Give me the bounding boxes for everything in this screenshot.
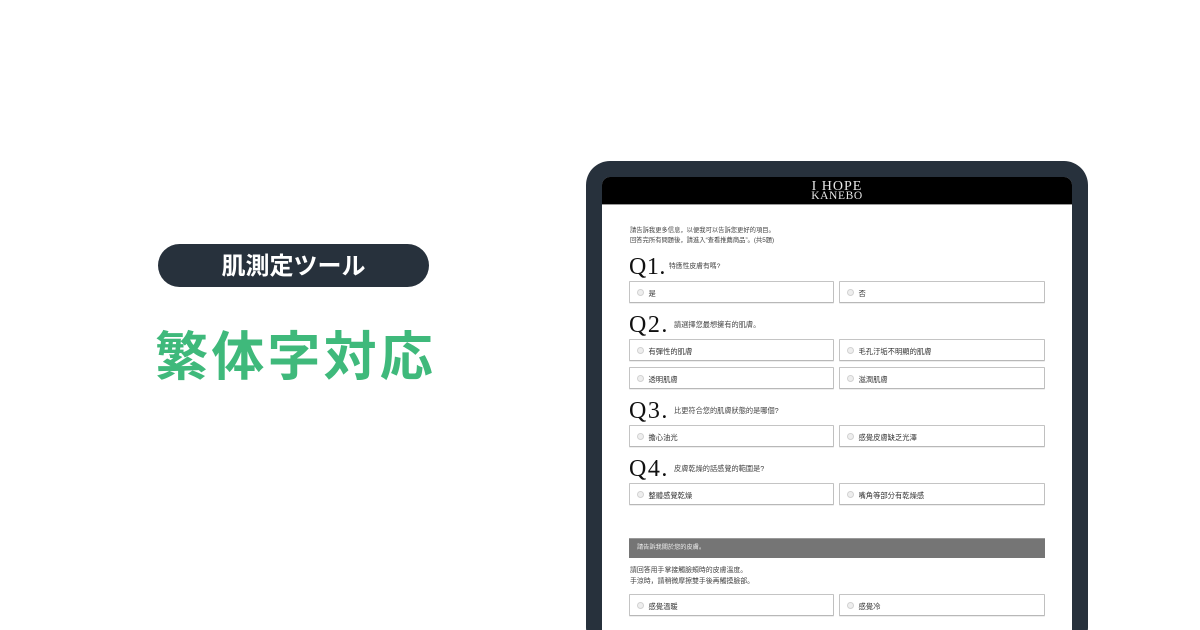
- option: 毛孔汙垢不明顯的肌膚: 毛孔汙垢不明顯的肌膚: [858, 346, 931, 356]
- option: 感覺冷: [839, 594, 1045, 616]
- option: 擔心油光: [629, 425, 834, 447]
- option: 整體感覺乾燥: 整體感覺乾燥: [648, 490, 692, 500]
- option: 透明肌膚: 透明肌膚: [648, 374, 678, 384]
- tablet screen: [602, 177, 1072, 630]
- option: 感覺皮膚缺乏光澤: 感覺皮膚缺乏光澤: [858, 432, 917, 442]
- section bar: [629, 538, 1045, 558]
- option: 嘴角等部分有乾燥感: [839, 483, 1045, 505]
- Q4 label: Q4.: [629, 456, 669, 482]
- option: 滋潤肌膚: [839, 367, 1045, 389]
- option: 是: 是: [648, 288, 656, 298]
- question 2: [629, 312, 1045, 390]
- option: 是: [629, 281, 834, 303]
- title: 繁体字対応: 繁体字対応: [155, 328, 436, 387]
- option: 擔心油光: 擔心油光: [648, 432, 678, 442]
- Q2 text: 請選擇您最想擁有的肌膚。: [674, 320, 760, 329]
- option: 感覺溫暖: [629, 594, 834, 616]
- option: 有彈性的肌膚: 有彈性的肌膚: [648, 346, 692, 356]
- option: 感覺溫暖: 感覺溫暖: [648, 602, 678, 610]
- badge: 肌測定ツール: 肌測定ツール: [222, 253, 366, 280]
- option: 否: 否: [858, 288, 866, 298]
- option: 透明肌膚: [629, 367, 834, 389]
- Q3 text: 比更符合您的肌膚狀態的是哪個?: [674, 406, 779, 415]
- option: 有彈性的肌膚: [629, 339, 834, 361]
- intro text: 回答完所有問題後，請進入“查看推薦商品”。(共5題): [630, 237, 774, 244]
- question 4: [629, 456, 1045, 506]
- option: 感覺冷: 感覺冷: [858, 602, 880, 610]
- logo: I HOPE KANEBO: [811, 179, 863, 202]
- section instruction text: 請回答用手掌接觸臉頰時的皮膚溫度。: [630, 567, 747, 574]
- logo: I HOPE KANEBO: I HOPE: [812, 179, 862, 194]
- option: 滋潤肌膚: 滋潤肌膚: [858, 374, 888, 384]
- Q2 label: Q2.: [629, 312, 669, 338]
- Q4 text: 皮膚乾燥的話感覺的範圍是?: [674, 464, 764, 473]
- screen header with logo: [602, 177, 1072, 205]
- badge: 肌測定ツール: [158, 244, 429, 287]
- question 1: [629, 254, 1045, 304]
- option: 否: [839, 281, 1045, 303]
- Q1 text: 特應性皮膚有嗎?: [669, 263, 720, 270]
- intro text: [630, 226, 775, 244]
- section instruction text: [630, 566, 754, 585]
- logo: I HOPE KANEBO: KANEBO: [811, 190, 863, 202]
- section bar: 請告訴我關於您的皮膚。: [637, 544, 705, 551]
- Q1 label: Q1.: [629, 254, 666, 280]
- option: 整體感覺乾燥: [629, 483, 834, 505]
- question 3: [629, 398, 1045, 448]
- option: 嘴角等部分有乾燥感: 嘴角等部分有乾燥感: [858, 490, 924, 500]
- section instruction text: 手涼時，請稍微摩擦雙手後再觸摸臉部。: [630, 578, 754, 585]
- tablet frame: [586, 161, 1088, 630]
- option: 感覺皮膚缺乏光澤: [839, 425, 1045, 447]
- intro text: 請告訴我更多信息，以便我可以告訴您更好的項目。: [630, 227, 775, 234]
- Q3 label: Q3.: [629, 398, 669, 424]
- option: 毛孔汙垢不明顯的肌膚: [839, 339, 1045, 361]
